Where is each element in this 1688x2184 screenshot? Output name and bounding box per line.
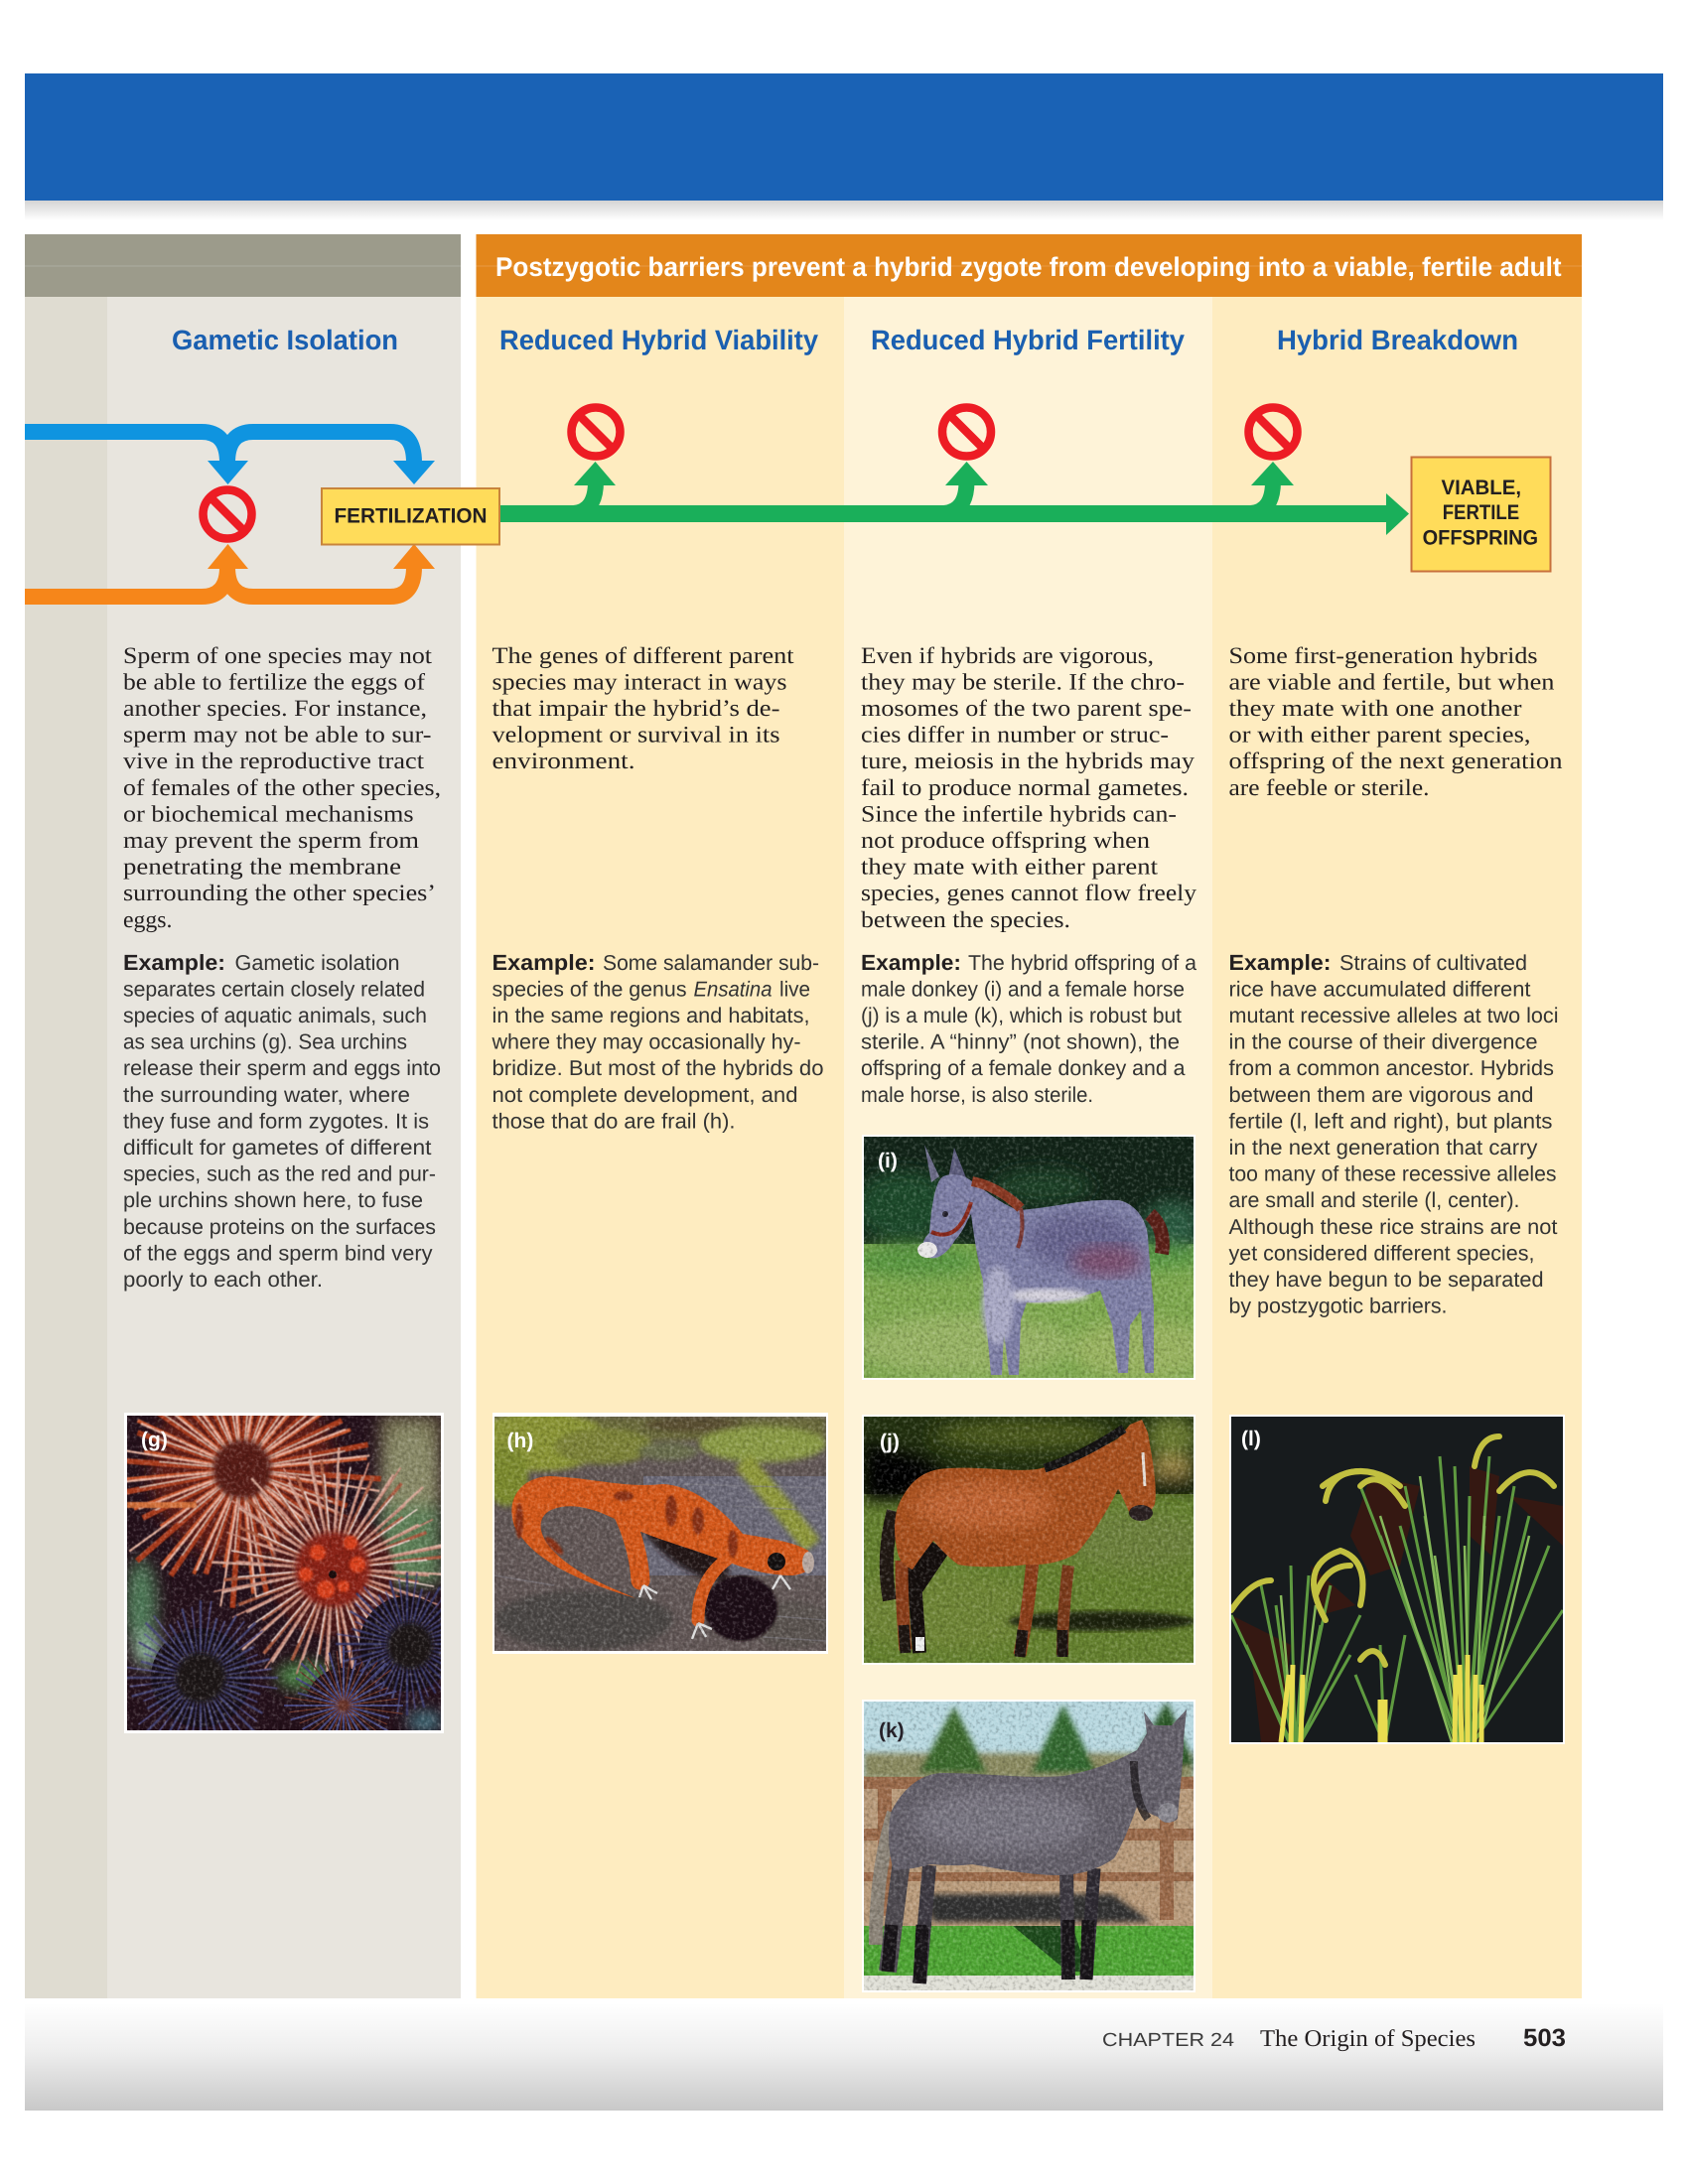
- text block: reduced hybrid viability description: environment.: [492, 749, 635, 774]
- text block: reduced hybrid fertility description: mosomes of the two parent spe-: [861, 696, 1192, 722]
- column heading: Reduced Hybrid Fertility: Reduced Hybrid Fertility: [871, 325, 1185, 355]
- text block: gametic isolation description: penetrating the membrane: [123, 855, 401, 881]
- text block: reduced hybrid viability description: The genes of different parent: [492, 643, 794, 669]
- column heading: Hybrid Breakdown: Hybrid Breakdown: [1277, 325, 1518, 355]
- text block: hybrid breakdown example: Strains of cultivated: [1339, 951, 1527, 975]
- text block: gametic isolation example: species, such as the red and pur-: [123, 1162, 436, 1186]
- text block: gametic isolation example: separates certain closely related: [123, 977, 425, 1001]
- text block: reduced hybrid fertility description: cies differ in number or struc-: [861, 723, 1169, 749]
- text block: reduced hybrid fertility example: sterile. A “hinny” (not shown), the: [861, 1030, 1180, 1054]
- text block: reduced hybrid fertility description: fail to produce normal gametes.: [861, 775, 1189, 801]
- text block: gametic isolation description: another species. For instance,: [123, 696, 427, 722]
- box: viable, fertile offspring: FERTILE: [1443, 501, 1519, 524]
- text block: reduced hybrid fertility example: offspring of a female donkey and a: [861, 1056, 1186, 1080]
- text block: reduced hybrid fertility example: The hybrid offspring of a: [968, 951, 1196, 975]
- text block: reduced hybrid viability example: where they may occasionally hy-: [491, 1030, 800, 1054]
- text block: gametic isolation description: surrounding the other species’: [123, 881, 436, 906]
- text block: reduced hybrid fertility description: between the species.: [861, 907, 1070, 933]
- text block: reduced hybrid viability example: live: [779, 977, 810, 1001]
- text block: reduced hybrid fertility example: Example:: [861, 950, 961, 975]
- text block: reduced hybrid fertility example: [861, 950, 1196, 1107]
- text block: hybrid breakdown example: in the course of their divergence: [1229, 1030, 1537, 1054]
- text block: reduced hybrid viability description: that impair the hybrid’s de-: [492, 696, 780, 722]
- text block: gametic isolation example: as sea urchins (g). Sea urchins: [123, 1030, 407, 1054]
- top blue banner: [25, 73, 1663, 220]
- text block: reduced hybrid viability example: Example:: [492, 950, 596, 975]
- photo (k): mule: [862, 1700, 1196, 1992]
- text block: gametic isolation example: of the eggs and sperm bind very: [123, 1241, 433, 1265]
- box: fertilization: FERTILIZATION: [334, 504, 487, 528]
- photo (g): sea urchins: (g): [141, 1429, 168, 1451]
- photo (l): rice plants: [1229, 1415, 1565, 1744]
- text block: gametic isolation description: be able to fertilize the eggs of: [123, 669, 425, 695]
- text block: reduced hybrid fertility description: they mate with either parent: [861, 855, 1159, 881]
- photo (j): horse: (j): [880, 1431, 900, 1453]
- text block: gametic isolation description: may prevent the sperm from: [123, 828, 419, 854]
- text block: hybrid breakdown example: between them are vigorous and: [1229, 1083, 1533, 1107]
- text block: hybrid breakdown example: are small and sterile (l, center).: [1229, 1188, 1519, 1212]
- text block: reduced hybrid fertility example: male donkey (i) and a female horse: [861, 977, 1185, 1001]
- box: viable, fertile offspring: VIABLE,: [1442, 477, 1521, 499]
- text block: hybrid breakdown example: rice have accumulated different: [1229, 977, 1531, 1001]
- text block: hybrid breakdown description: Some first-generation hybrids: [1229, 643, 1537, 669]
- text block: hybrid breakdown example: Although these rice strains are not: [1229, 1215, 1558, 1239]
- text block: reduced hybrid fertility description: Since the infertile hybrids can-: [861, 801, 1177, 827]
- text block: gametic isolation example: release their sperm and eggs into: [123, 1056, 441, 1080]
- text block: gametic isolation example: because proteins on the surfaces: [123, 1215, 436, 1239]
- footer: chapter label: CHAPTER 24: [1102, 2030, 1234, 2051]
- text block: reduced hybrid viability example: bridize. But most of the hybrids do: [492, 1056, 824, 1080]
- footer: chapter title: The Origin of Species: [1260, 2026, 1476, 2052]
- text block: reduced hybrid fertility description: ture, meiosis in the hybrids may: [861, 749, 1195, 774]
- text block: reduced hybrid fertility description: Even if hybrids are vigorous,: [861, 643, 1154, 669]
- text block: hybrid breakdown example: mutant recessive alleles at two loci: [1229, 1004, 1559, 1027]
- photo (g): sea urchins: [83, 1310, 488, 1773]
- text block: gametic isolation description: [123, 643, 441, 933]
- icon: prohibition sign at hybrid breakdown: [1249, 407, 1297, 457]
- orange header band: Postzygotic barriers prevent a hybrid zygote from developing into a viable, fertile adult: [495, 252, 1562, 282]
- text block: gametic isolation description: eggs.: [123, 907, 173, 933]
- arrow: blue sperm path: [25, 432, 435, 484]
- text block: reduced hybrid fertility description: not produce offspring when: [861, 828, 1150, 854]
- arrow: green development line with branches: [496, 462, 1409, 535]
- panel: gametic isolation background: [25, 234, 461, 1998]
- photo (i): donkey: (i): [878, 1150, 898, 1172]
- text block: hybrid breakdown example: yet considered different species,: [1229, 1241, 1535, 1265]
- photo (l): rice plants: (l): [1241, 1428, 1261, 1450]
- text block: gametic isolation example: they fuse and form zygotes. It is: [123, 1109, 429, 1133]
- icon: prohibition sign at reduced hybrid viability: [572, 407, 620, 457]
- box: viable, fertile offspring: OFFSPRING: [1423, 526, 1538, 550]
- text block: hybrid breakdown description: or with either parent species,: [1229, 723, 1531, 749]
- text block: gametic isolation example: the surrounding water, where: [123, 1083, 410, 1107]
- photo (j): horse: [844, 1415, 1201, 1665]
- text block: gametic isolation example: [123, 950, 441, 1292]
- text block: gametic isolation description: Sperm of one species may not: [123, 643, 433, 669]
- photo (k): mule: (k): [879, 1719, 905, 1742]
- text block: hybrid breakdown description: are viable and fertile, but when: [1229, 669, 1555, 695]
- column heading: Gametic Isolation: Gametic Isolation: [172, 325, 398, 355]
- text block: reduced hybrid viability example: Some salamander sub-: [603, 951, 819, 975]
- text block: hybrid breakdown example: they have begun to be separated: [1229, 1268, 1543, 1292]
- text block: hybrid breakdown description: are feeble or sterile.: [1229, 775, 1430, 801]
- icon: prohibition sign at gametic isolation: [203, 490, 252, 538]
- text block: hybrid breakdown example: from a common ancestor. Hybrids: [1229, 1056, 1554, 1080]
- text block: reduced hybrid fertility example: (j) is a mule (k), which is robust but: [861, 1004, 1182, 1027]
- text block: hybrid breakdown example: in the next generation that carry: [1229, 1136, 1538, 1160]
- text block: reduced hybrid fertility description: they may be sterile. If the chro-: [861, 669, 1185, 695]
- text block: reduced hybrid fertility description: species, genes cannot flow freely: [861, 881, 1196, 906]
- text block: hybrid breakdown description: they mate with one another: [1229, 696, 1522, 722]
- box: viable, fertile offspring: [1412, 457, 1551, 572]
- box: fertilization: [322, 488, 499, 544]
- arrow: orange egg path: [25, 544, 435, 597]
- text block: hybrid breakdown description: offspring of the next generation: [1229, 749, 1563, 774]
- photo (i): donkey: [844, 1135, 1211, 1380]
- text block: reduced hybrid fertility example: male horse, is also sterile.: [861, 1083, 1093, 1107]
- text block: reduced hybrid viability description: species may interact in ways: [492, 669, 786, 695]
- text block: reduced hybrid viability example: species of the genus: [492, 977, 687, 1001]
- text block: hybrid breakdown example: [1229, 950, 1559, 1318]
- text block: gametic isolation example: Gametic isolation: [234, 951, 399, 975]
- panel: postzygotic columns background: [477, 297, 1582, 1998]
- footer gradient band: [25, 2003, 1663, 2111]
- column heading: Reduced Hybrid Viability: Reduced Hybrid Viability: [499, 325, 818, 355]
- text block: gametic isolation example: poorly to each other.: [123, 1268, 323, 1292]
- text block: reduced hybrid viability example: [491, 950, 824, 1133]
- text block: gametic isolation example: Example:: [123, 950, 225, 975]
- text block: hybrid breakdown example: by postzygotic barriers.: [1229, 1295, 1448, 1318]
- photo (h): salamander: (h): [506, 1430, 533, 1452]
- text block: hybrid breakdown description: [1229, 643, 1563, 801]
- text block: gametic isolation description: vive in the reproductive tract: [123, 749, 425, 774]
- icon: prohibition sign at reduced hybrid fertility: [942, 407, 991, 457]
- text block: hybrid breakdown example: too many of these recessive alleles: [1229, 1162, 1557, 1186]
- text block: hybrid breakdown example: Example:: [1229, 950, 1331, 975]
- text block: reduced hybrid fertility description: [861, 643, 1196, 933]
- text block: reduced hybrid viability example: not complete development, and: [492, 1083, 798, 1107]
- footer: page number: 503: [1523, 2024, 1566, 2052]
- text block: reduced hybrid viability description: [492, 643, 794, 774]
- text block: gametic isolation description: sperm may not be able to sur-: [123, 723, 431, 749]
- text block: hybrid breakdown example: fertile (l, left and right), but plants: [1229, 1109, 1553, 1133]
- text block: gametic isolation description: of females of the other species,: [123, 775, 441, 801]
- text block: gametic isolation example: difficult for gametes of different: [123, 1136, 432, 1160]
- text block: gametic isolation example: ple urchins shown here, to fuse: [123, 1188, 423, 1212]
- orange header band: [25, 234, 1582, 297]
- text block: reduced hybrid viability example: in the same regions and habitats,: [492, 1004, 810, 1027]
- text block: reduced hybrid viability description: velopment or survival in its: [492, 723, 780, 749]
- text block: gametic isolation example: species of aquatic animals, such: [123, 1004, 427, 1027]
- text block: reduced hybrid viability example: Ensatina: [693, 977, 773, 1001]
- text block: gametic isolation description: or biochemical mechanisms: [123, 801, 414, 827]
- photo (h): salamander: [470, 1412, 832, 1654]
- text block: reduced hybrid viability example: those that do are frail (h).: [492, 1109, 735, 1133]
